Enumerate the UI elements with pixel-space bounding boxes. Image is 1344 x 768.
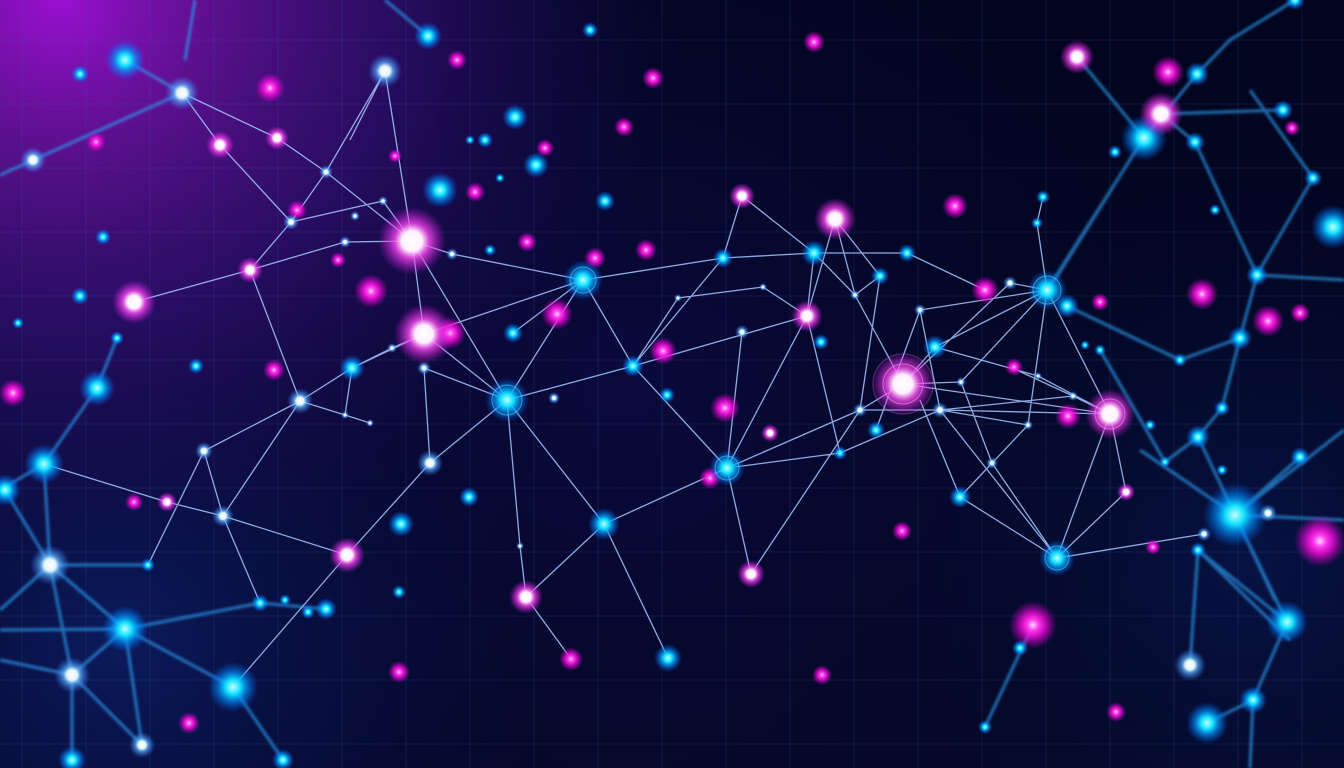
hub rings [492, 267, 1125, 570]
white magenta-glow nodes [112, 40, 1183, 614]
network edges [44, 71, 1204, 687]
white blue-glow nodes [20, 147, 1277, 758]
